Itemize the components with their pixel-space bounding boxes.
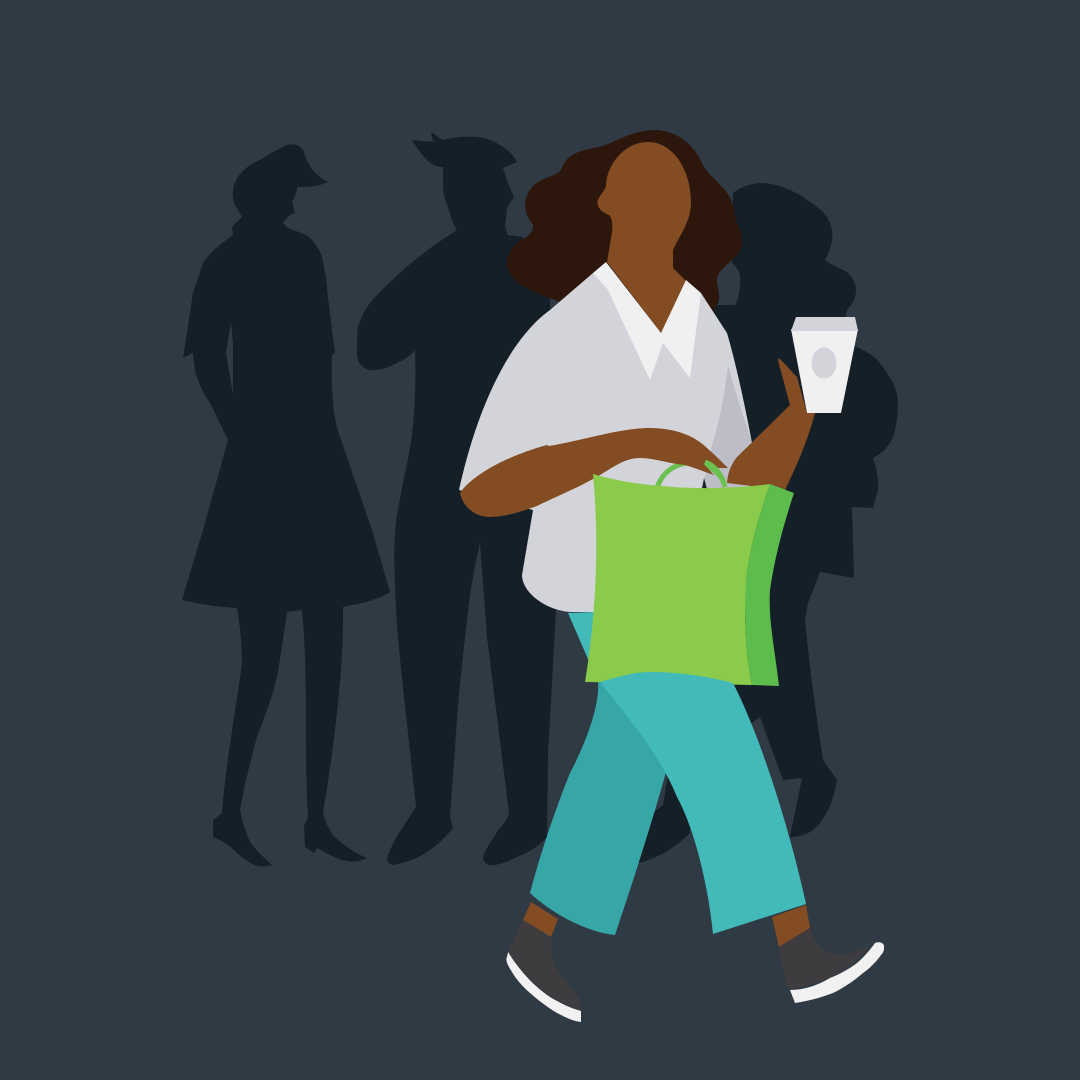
- near arm: [460, 428, 728, 517]
- right shoe sole: [790, 942, 884, 1003]
- silhouette: woman in dress: [182, 144, 390, 867]
- gap between hair and person: [715, 263, 740, 305]
- bag handle: [657, 463, 725, 488]
- left ankle: [523, 902, 558, 937]
- collar: [593, 262, 701, 380]
- hair: [507, 130, 742, 312]
- gap between arm and body: [226, 322, 233, 395]
- front leg: light teal: [600, 672, 806, 934]
- right shoe: [779, 928, 870, 990]
- blouse: [459, 273, 752, 612]
- dark sliver under handle: [702, 478, 707, 489]
- blouse shade: [700, 365, 752, 490]
- waist sliver: light teal: [568, 612, 601, 682]
- back leg: dark teal: [530, 682, 668, 935]
- right ankle: [772, 905, 810, 947]
- shopping bag side: [745, 484, 794, 686]
- shopping bag front: [585, 474, 770, 685]
- silhouette: man with quiff: [357, 132, 556, 865]
- left shoe sole: [506, 952, 581, 1022]
- left shoe: [508, 920, 581, 1012]
- far arm and hand: [727, 358, 815, 490]
- handle over finger: [705, 462, 725, 487]
- silhouette: person with curly hair behind: [637, 183, 898, 863]
- face and neck: [597, 142, 691, 333]
- figure: main woman: [459, 130, 884, 1022]
- coffee cup: [791, 317, 858, 413]
